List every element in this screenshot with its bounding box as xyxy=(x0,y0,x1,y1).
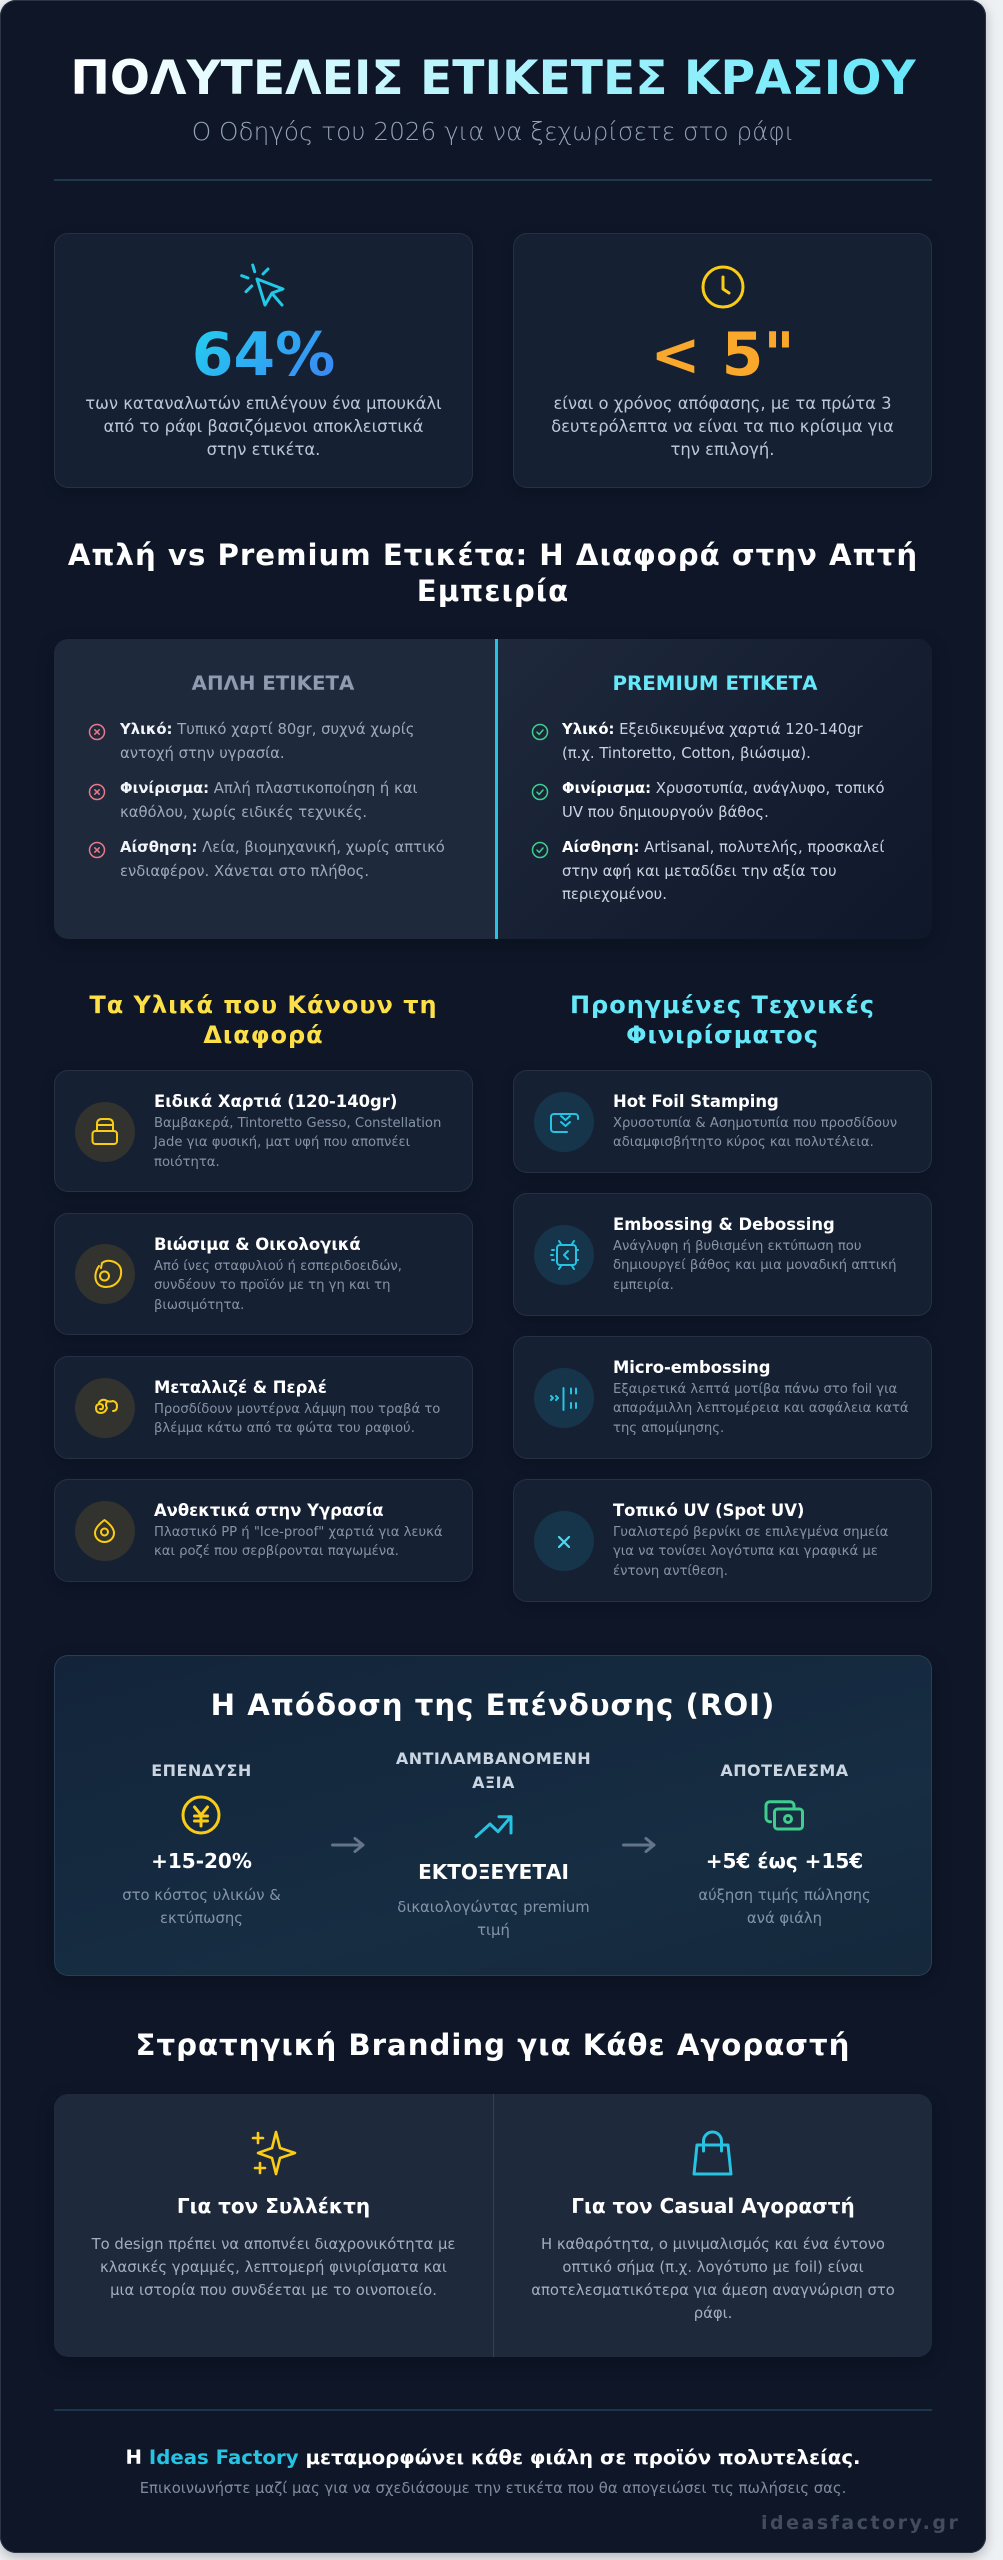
stat description: των καταναλωτών επιλέγουν ένα μπουκάλι xyxy=(85,394,442,413)
text xyxy=(562,721,863,762)
description: κλασικές γραμμές, λεπτομερή φινιρίσματα και xyxy=(100,2259,447,2276)
description: βιωσιμότητα. xyxy=(154,1298,244,1313)
description: Βαμβακερά, Tintoretto Gesso, Constellation xyxy=(154,1116,441,1130)
description: Η καθαρότητα, ο μινιμαλισμός και ένα έντονο xyxy=(541,2236,885,2253)
card: special papers xyxy=(54,1070,473,1192)
description: Προσδίδουν μοντέρνα λάμψη που τραβά το xyxy=(154,1402,440,1416)
text: Υλικό: Τυπικό χαρτί 80gr, συχνά χωρίς xyxy=(120,721,414,738)
icon: trend up xyxy=(463,1797,523,1857)
card: metallic xyxy=(54,1356,473,1459)
text: UV που δημιουργούν βάθος. xyxy=(562,804,769,821)
text: καθόλου, χωρίς ειδικές τεχνικές. xyxy=(120,804,367,821)
description xyxy=(376,1896,611,1942)
arrow xyxy=(622,1837,656,1853)
icon: swirl xyxy=(75,1378,135,1438)
icon: chip xyxy=(534,1225,594,1285)
description: ποιότητα. xyxy=(154,1155,220,1170)
heading: materials: Διαφορά xyxy=(203,1021,324,1049)
heading: materials xyxy=(89,991,438,1049)
title: Micro-embossing xyxy=(613,1358,771,1377)
column: premium label xyxy=(495,639,932,939)
panel: comparison xyxy=(54,639,932,939)
description: ράφι. xyxy=(694,2305,732,2322)
stat description: την επιλογή. xyxy=(671,440,774,459)
heading: comparison: Απλή vs Premium Ετικέτα: Η Διαφορά στην Απτή xyxy=(68,538,918,572)
stat description xyxy=(551,394,894,459)
big number under 5 seconds: < 5" xyxy=(650,320,795,390)
card: micro embossing xyxy=(513,1336,932,1459)
title: Τοπικό UV (Spot UV) xyxy=(613,1501,804,1520)
icon: cash xyxy=(754,1785,814,1845)
text xyxy=(562,780,885,821)
description: μια ιστορία που συνδέεται με το οινοποιείο. xyxy=(110,2282,437,2299)
icon: jar xyxy=(75,1102,135,1162)
description: και ροζέ που σερβίρονται παγωμένα. xyxy=(154,1544,399,1559)
text xyxy=(120,839,445,880)
description xyxy=(154,1524,443,1559)
text: Φινίρισμα: Απλή πλαστικοποίηση ή και xyxy=(120,780,417,797)
icon: cross sparkle xyxy=(534,1511,594,1571)
description: αδιαμφισβήτητο κύρος και πολυτέλεια. xyxy=(613,1135,874,1150)
list item: material xyxy=(532,721,863,762)
text: Αίσθηση: Λεία, βιομηχανική, χωρίς απτικό xyxy=(120,839,445,856)
text: Υλικό: Εξειδικευμένα χαρτιά 120-140gr xyxy=(562,721,863,738)
description: βλέμμα κάτω από τα φώτα του ραφιού. xyxy=(154,1421,415,1436)
list item: finish xyxy=(88,780,417,821)
description: Χρυσοτυπία & Ασημοτυπία που προσδίδουν xyxy=(613,1116,897,1130)
icon: x circle xyxy=(88,724,106,740)
big number 64%: 64% xyxy=(192,320,335,390)
stat description: δευτερόλεπτα να είναι τα πιο κρίσιμα για xyxy=(551,417,894,436)
text: Αίσθηση: Artisanal, πολυτελής, προσκαλεί xyxy=(562,839,884,856)
description: ανά φιάλη xyxy=(747,1910,822,1927)
label: ΑΞΙΑ xyxy=(472,1773,515,1792)
description xyxy=(613,1116,897,1150)
stat description: από το ράφι βασιζόμενοι αποκλειστικά xyxy=(104,417,423,436)
card: spot uv xyxy=(513,1479,932,1602)
description: της απομίμησης. xyxy=(613,1421,724,1436)
title: Hot Foil Stamping xyxy=(613,1092,779,1111)
icon: micro pattern xyxy=(534,1368,594,1428)
title: ΠΟΛΥΤΕΛΕΙΣ ΕΤΙΚΕΤΕΣ ΚΡΑΣΙΟΥ xyxy=(70,51,916,106)
icon: check circle xyxy=(532,784,548,800)
icon: foil stamp xyxy=(534,1092,594,1152)
description xyxy=(494,2233,932,2325)
description xyxy=(153,1116,441,1170)
watermark: ideasfactory.gr xyxy=(761,2512,960,2534)
title: Για τον Casual Αγοραστή xyxy=(571,2194,855,2218)
description: Εξαιρετικά λεπτά μοτίβα πάνω στο foil για xyxy=(613,1382,897,1396)
footer subtext: Επικοινωνήστε μαζί μας για να σχεδιάσουμε την ετικέτα που θα απογειώσει τις πωλήσεις σας. xyxy=(140,2480,846,2497)
description xyxy=(613,1238,897,1293)
description: Ανάγλυφη ή βυθισμένη εκτύπωση που xyxy=(613,1238,862,1254)
icon: shopping bag xyxy=(683,2123,743,2183)
description: στο κόστος υλικών & xyxy=(122,1887,281,1904)
text xyxy=(120,721,414,762)
icon: x circle xyxy=(88,784,106,800)
card: embossing xyxy=(513,1193,932,1316)
description xyxy=(613,1382,909,1436)
description: δικαιολογώντας premium xyxy=(397,1899,590,1916)
icon: cursor click xyxy=(240,264,284,307)
description: εκτύπωσης xyxy=(160,1910,243,1927)
description: έντονη αντίθεση. xyxy=(613,1564,728,1579)
panel: branding strategy xyxy=(54,2094,932,2357)
description: Από ίνες σταφυλιού ή εσπεριδοειδών, xyxy=(154,1258,402,1274)
description: τιμή xyxy=(477,1922,510,1939)
description xyxy=(154,1258,402,1313)
text: περιεχομένου. xyxy=(562,886,667,903)
premium label heading: PREMIUM ΕΤΙΚΕΤΑ xyxy=(613,672,817,695)
text: (π.χ. Tintoretto, Cotton, βιώσιμα). xyxy=(562,745,811,762)
description xyxy=(613,1524,888,1579)
title: Ειδικά Χαρτιά (120-140gr) xyxy=(154,1092,397,1111)
label: ΑΠΟΤΕΛΕΣΜΑ xyxy=(720,1761,849,1780)
card: sustainable xyxy=(54,1213,473,1335)
icon: sparkles xyxy=(244,2123,304,2183)
title: Βιώσιμα & Οικολογικά xyxy=(154,1235,361,1254)
panel: ROI xyxy=(54,1655,932,1976)
description: απαράμιλλη λεπτομέρεια και ασφάλεια κατά xyxy=(613,1401,909,1416)
title: Embossing & Debossing xyxy=(613,1215,835,1234)
ROI heading: Η Απόδοση της Επένδυσης (ROI) xyxy=(211,1688,775,1722)
column: result xyxy=(667,1755,902,1945)
value: +15-20% xyxy=(151,1849,252,1873)
description: Το design πρέπει να αποπνέει διαχρονικότητα με xyxy=(92,2236,455,2253)
icon: yen coin xyxy=(182,1796,220,1834)
value: +5€ έως +15€ xyxy=(706,1849,863,1873)
heading: materials: Τα Υλικά που Κάνουν τη xyxy=(89,991,438,1019)
label: ΑΝΤΙΛΑΜΒΑΝΟΜΕΝΗ xyxy=(396,1749,591,1768)
description xyxy=(154,1402,440,1436)
title: Ανθεκτικά στην Υγρασία xyxy=(154,1501,384,1520)
heading: techniques: Φινιρίσματος xyxy=(626,1021,819,1049)
icon: check circle xyxy=(532,724,548,740)
icon: x circle xyxy=(88,842,106,858)
footer headline: Η Ideas Factory μεταμορφώνει κάθε φιάλη σε προϊόν πολυτελείας. xyxy=(125,2446,861,2469)
panel: stat 5 seconds xyxy=(513,233,932,488)
description xyxy=(54,2233,493,2302)
list item: finish xyxy=(532,780,885,821)
description: οπτικό σήμα (π.χ. λογότυπο με foil) είναι xyxy=(562,2259,864,2276)
text xyxy=(562,839,884,903)
value: ΕΚΤΟΞΕΥΕΤΑΙ xyxy=(418,1860,569,1884)
icon: check circle xyxy=(532,842,548,858)
card: hot foil xyxy=(513,1070,932,1173)
title: Μεταλλιζέ & Περλέ xyxy=(154,1378,327,1397)
description: Jade για φυσική, ματ υφή που αποπνέει xyxy=(154,1135,410,1150)
stat description: στην ετικέτα. xyxy=(207,440,320,459)
description: συνδέουν το προϊόν με τη γη και τη xyxy=(154,1278,390,1293)
stat description xyxy=(85,394,442,459)
text: αντοχή στην υγρασία. xyxy=(120,745,285,762)
label: ΕΠΕΝΔΥΣΗ xyxy=(151,1761,252,1780)
column: perceived value xyxy=(376,1755,611,1945)
description: αποτελεσματικότερα για άμεση αναγνώριση στο xyxy=(531,2282,895,2299)
description xyxy=(667,1884,902,1930)
description: αύξηση τιμής πώλησης xyxy=(698,1887,871,1904)
icon: clock xyxy=(702,266,744,308)
heading: comparison: Εμπειρία xyxy=(417,574,569,608)
card: moisture resistant xyxy=(54,1479,473,1582)
heading: techniques: Προηγμένες Τεχνικές xyxy=(570,991,875,1019)
icon: spiral xyxy=(75,1244,135,1304)
column: plain label xyxy=(88,672,445,880)
stat description: είναι ο χρόνος απόφασης, με τα πρώτα 3 xyxy=(553,394,892,413)
list item: material xyxy=(88,721,414,762)
arrow xyxy=(331,1836,364,1854)
text: στην αφή και μεταδίδει την αξία του xyxy=(562,863,837,880)
heading: comparison xyxy=(68,538,918,608)
text: ενδιαφέρον. Χάνεται στο πλήθος. xyxy=(120,863,369,880)
text: Φινίρισμα: Χρυσοτυπία, ανάγλυφο, τοπικό xyxy=(562,780,885,797)
icon: drop xyxy=(75,1501,135,1561)
list item: feel xyxy=(88,839,445,880)
description: Γυαλιστερό βερνίκι σε επιλεγμένα σημεία xyxy=(613,1524,888,1540)
description xyxy=(122,1887,281,1927)
panel: stat 64% xyxy=(54,233,473,488)
description: εμπειρία. xyxy=(613,1278,674,1293)
description: για να τονίσει λογότυπα και γραφικά με xyxy=(613,1544,878,1559)
heading: branding strategy: Στρατηγική Branding για Κάθε Αγοραστή xyxy=(136,2028,850,2062)
column: collector xyxy=(54,2094,493,2357)
column: investment xyxy=(122,1761,281,1927)
title: Για τον Συλλέκτη xyxy=(177,2194,370,2218)
text xyxy=(120,780,417,821)
heading: techniques xyxy=(570,991,875,1049)
plain label heading: ΑΠΛΗ ΕΤΙΚΕΤΑ xyxy=(192,672,354,695)
column: casual buyer xyxy=(494,2094,932,2357)
label xyxy=(376,1747,611,1795)
description: δημιουργεί βάθος και μια μοναδική απτική xyxy=(613,1258,897,1273)
list item: feel xyxy=(532,839,884,903)
subtitle: Ο Οδηγός του 2026 για να ξεχωρίσετε στο ράφι xyxy=(192,117,794,146)
description: Πλαστικό PP ή "Ice-proof" χαρτιά για λευκά xyxy=(154,1524,443,1540)
